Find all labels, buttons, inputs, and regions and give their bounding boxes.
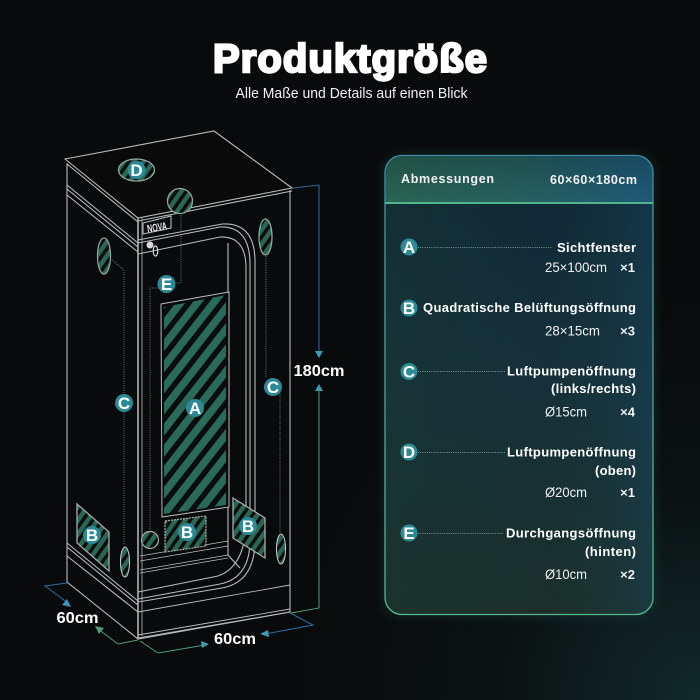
dimension: depth 60cm bbox=[45, 583, 138, 644]
panel: dimensions table bbox=[385, 156, 653, 614]
leader lines bbox=[110, 213, 280, 545]
badge B left: B bbox=[86, 526, 98, 545]
row E bbox=[400, 524, 636, 582]
row B: Quadratische Belüftungsöffnung bbox=[423, 300, 636, 315]
brand logo bbox=[143, 216, 171, 235]
badge B right: B bbox=[242, 517, 254, 536]
row D bbox=[400, 443, 636, 500]
row B: B bbox=[403, 299, 415, 318]
dimension: height 180cm bbox=[291, 185, 344, 613]
zipper bbox=[146, 242, 158, 256]
row E: (hinten) bbox=[585, 544, 636, 559]
opening B left bbox=[77, 504, 109, 571]
badge A bbox=[186, 399, 204, 418]
row B: 28×15cm bbox=[545, 324, 600, 338]
row A: A bbox=[403, 238, 415, 257]
row C: (links/rechts) bbox=[551, 381, 636, 396]
row A: Sichtfenster bbox=[557, 240, 636, 255]
tent diagram bbox=[65, 131, 292, 639]
panel header: 60×60×180cm bbox=[550, 173, 637, 187]
badge A: A bbox=[189, 399, 201, 418]
badge B right bbox=[239, 517, 257, 536]
opening C lower left bbox=[120, 547, 130, 577]
opening E lower bbox=[142, 532, 158, 548]
opening B right bbox=[233, 498, 265, 558]
badge D: D bbox=[130, 161, 143, 180]
panel side tint bbox=[385, 156, 653, 614]
row E: Ø10cm bbox=[545, 567, 587, 582]
row D: ×1 bbox=[620, 485, 635, 500]
badge E bbox=[158, 275, 176, 294]
dimension: height 180cm: 180cm bbox=[294, 363, 344, 380]
row D: (oben) bbox=[595, 463, 636, 478]
row D: Ø20cm bbox=[545, 485, 587, 500]
opening C lower right bbox=[276, 534, 286, 564]
row E: Durchgangsöffnung bbox=[506, 526, 636, 540]
row D: Luftpumpenöffnung bbox=[507, 444, 636, 460]
badge B center: B bbox=[181, 523, 193, 542]
badge C left bbox=[115, 394, 133, 413]
row E: E bbox=[403, 524, 415, 543]
badge B left bbox=[83, 526, 101, 545]
opening C left bbox=[98, 238, 110, 274]
opening E top bbox=[168, 188, 192, 214]
title: Produktgröße bbox=[213, 37, 487, 81]
row C: Ø15cm bbox=[545, 404, 587, 420]
row C: C bbox=[403, 362, 415, 382]
dimension: width 60cm: 60cm bbox=[214, 631, 256, 648]
row A bbox=[400, 238, 636, 275]
subtitle: Alle Maße und Details auf einen Blick bbox=[236, 86, 468, 102]
row E: ×2 bbox=[620, 567, 635, 582]
row C: Luftpumpenöffnung bbox=[507, 364, 636, 378]
panel glow bbox=[385, 156, 653, 614]
badge D bbox=[128, 161, 146, 180]
opening B center bbox=[165, 516, 206, 552]
row D: D bbox=[403, 443, 415, 462]
badge C right bbox=[264, 378, 282, 397]
row B: ×3 bbox=[620, 324, 635, 338]
opening C right bbox=[259, 219, 272, 255]
dimension: depth 60cm: 60cm bbox=[56, 610, 98, 627]
tent outline bbox=[65, 131, 292, 639]
row C: ×4 bbox=[620, 404, 636, 420]
dimension: width 60cm bbox=[140, 613, 313, 653]
badge C left: C bbox=[118, 394, 130, 413]
window A bbox=[161, 292, 229, 517]
panel background bbox=[385, 156, 653, 614]
row C bbox=[400, 362, 636, 420]
panel header: Abmessungen bbox=[401, 172, 494, 186]
row A: ×1 bbox=[620, 260, 635, 275]
row A: 25×100cm bbox=[545, 260, 607, 275]
badge E: E bbox=[161, 275, 172, 294]
badge B center bbox=[178, 523, 196, 542]
panel header bbox=[385, 156, 653, 204]
opening D bbox=[118, 159, 154, 181]
brand logo: NOVA bbox=[146, 220, 168, 235]
badge C right: C bbox=[267, 378, 279, 397]
row B bbox=[400, 299, 636, 338]
